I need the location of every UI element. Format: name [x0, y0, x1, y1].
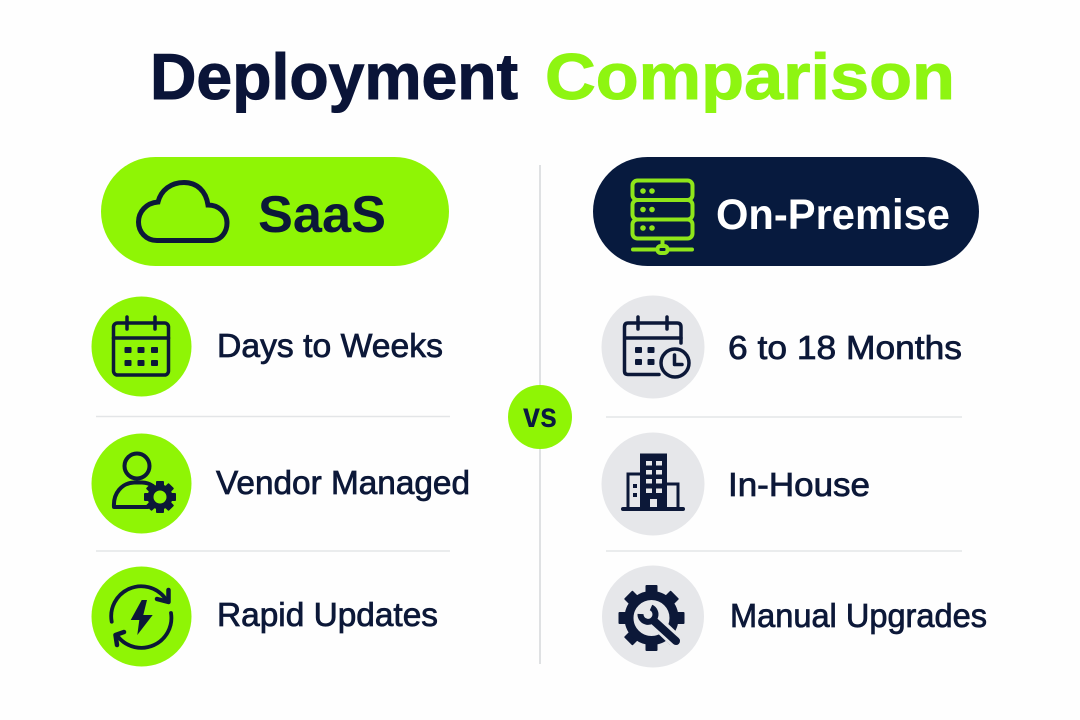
row: rapid updates: Rapid Updates: [217, 596, 438, 633]
On-Premise header pill: On-Premise: [716, 191, 950, 239]
row: manual upgrades: [602, 566, 987, 668]
On-Premise header pill: [593, 157, 979, 266]
row: 6 to 18 months: [602, 296, 962, 398]
title: Deployment: [150, 40, 518, 113]
row: days to weeks: [92, 296, 443, 396]
row: 6 to 18 months: 6 to 18 Months: [728, 329, 962, 366]
vs badge: vs: [523, 396, 557, 435]
title: [150, 40, 955, 113]
SaaS header pill: SaaS: [258, 186, 386, 244]
SaaS header pill: [101, 157, 449, 266]
panel: SaaS: [92, 157, 470, 666]
vs badge: [508, 385, 572, 449]
row: in-house: In-House: [728, 466, 870, 503]
row: manual upgrades: Manual Upgrades: [730, 597, 987, 634]
row: vendor managed: [92, 434, 470, 534]
row: rapid updates: [92, 566, 438, 666]
title: Comparison: [545, 40, 955, 113]
row: vendor managed: Vendor Managed: [216, 464, 470, 501]
row: days to weeks: Days to Weeks: [217, 327, 443, 364]
panel: On-Premise: [593, 157, 987, 668]
row: in-house: [602, 432, 870, 536]
